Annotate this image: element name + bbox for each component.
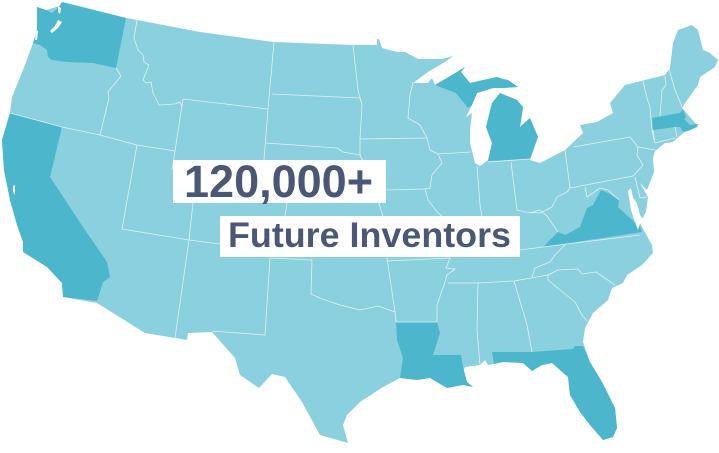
highlighted state: California (2, 113, 110, 301)
coastal water cut-outs (13, 6, 677, 230)
label: 120,000+: 120,000+ (184, 156, 373, 207)
highlighted state: Washington (33, 2, 126, 68)
highlighted state: Virginia (543, 190, 642, 247)
label: Future Inventors: Future Inventors (228, 216, 511, 255)
highlighted state: Massachusetts (652, 109, 698, 132)
state borders (10, 20, 683, 365)
highlighted state: Florida (492, 346, 617, 440)
highlighted state: Louisiana (396, 322, 473, 388)
highlighted state: Michigan (435, 67, 538, 161)
